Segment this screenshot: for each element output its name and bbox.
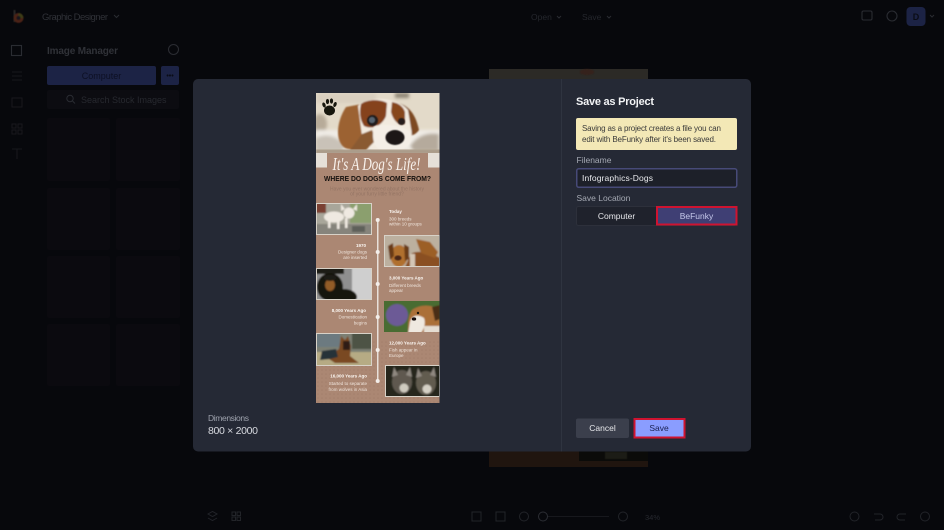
- avatar: [906, 7, 926, 26]
- computer button: Computer: [82, 71, 121, 81]
- notice box: edit with BeFunky after it's been saved.: [582, 135, 716, 144]
- more button: •••: [166, 73, 174, 80]
- timeline text: 16000 years: [328, 374, 367, 392]
- icon: comments: [862, 11, 872, 20]
- dimmed bottom toolbar: [208, 512, 930, 521]
- timeline text: 8000 years: begins: [354, 320, 368, 326]
- title band: [316, 153, 440, 168]
- icon: redo: [897, 514, 906, 520]
- more button: [161, 66, 179, 85]
- filename label: Filename: [576, 155, 612, 165]
- timeline text: today: within 10 groups: [389, 222, 423, 226]
- dimmed top bar: [14, 7, 934, 26]
- dimensions: [208, 413, 258, 437]
- timeline text: today: [389, 209, 423, 226]
- zoom out: [520, 512, 528, 521]
- photo: two brown dogs: [384, 235, 440, 267]
- photo: black and tan dog: [316, 268, 372, 300]
- image manager heading: Image Manager: [47, 46, 118, 57]
- save location label: Save Location: [576, 193, 631, 203]
- timeline text: 12000 years: [389, 340, 426, 358]
- timeline text: 8000 years: 8,000 Years Ago: [332, 308, 366, 313]
- zoom in: [618, 512, 628, 521]
- icon: layers: [208, 512, 217, 520]
- zoom slider: [538, 512, 609, 521]
- cancel button: Cancel: [589, 423, 616, 433]
- workspace label: Graphic Designer: [42, 12, 108, 23]
- dialog heading: Save as Project: [576, 96, 654, 108]
- icon: actual size: [496, 512, 505, 521]
- thumbnail grid: [47, 118, 180, 386]
- save menu: Save: [582, 12, 602, 22]
- icon: help: [887, 11, 897, 21]
- dimmed left sidebar: [12, 44, 180, 386]
- save location toggle: [576, 206, 736, 226]
- open menu: Open: [531, 12, 552, 22]
- photo: spaniel header: [313, 93, 440, 154]
- timeline text: 3000 years: Different breeds: [389, 283, 422, 288]
- icon: fit: [472, 512, 481, 521]
- timeline text: 16000 years: 16,000 Years Ago: [330, 374, 367, 378]
- icon: undo: [874, 514, 883, 520]
- timeline text: 16000 years: Started to separate: [329, 381, 367, 386]
- notice box: Saving as a project creates a file you can: [582, 124, 721, 133]
- timeline text: 1970: 1970: [356, 243, 366, 248]
- avatar: D: [913, 12, 920, 22]
- dimensions: 800 × 2000: [208, 425, 258, 437]
- timeline text: 12000 years: Europe: [389, 353, 404, 358]
- icon: grid: [232, 512, 240, 520]
- befunky option: BeFunky: [680, 211, 714, 221]
- photo: collie in flowers: [384, 301, 440, 332]
- title: It's A Dog's Life!: [332, 154, 421, 174]
- timeline text: today: Today: [389, 209, 402, 214]
- infographic preview: [313, 93, 442, 403]
- intro text: of your furry little friend?: [350, 192, 404, 198]
- timeline text: 1970: Designer dogs: [338, 250, 368, 254]
- timeline text: 1970: are inserted: [343, 255, 367, 260]
- befunky option: [657, 207, 736, 224]
- cancel button: [576, 418, 629, 438]
- photo: shepherd lying down: [316, 333, 372, 366]
- logo: [14, 10, 24, 23]
- sidebar icons: [12, 46, 22, 159]
- subtitle heading: WHERE DO DOGS COME FROM?: [324, 174, 431, 183]
- timeline text: 1970: [338, 243, 368, 260]
- computer button: [47, 66, 156, 85]
- dimmed canvas behind dialog: [489, 69, 648, 467]
- search box: [47, 90, 179, 109]
- timeline text: 3000 years: [389, 276, 424, 293]
- timeline text: 12000 years: 12,000 Years Ago: [389, 340, 426, 346]
- filename input: [577, 169, 737, 187]
- timeline text: 3000 years: appear: [389, 288, 404, 293]
- photo: two wolves: [385, 365, 440, 397]
- zoom percentage: 34%: [645, 513, 660, 522]
- icon: history: [920, 512, 930, 521]
- intro text: Have you ever wondered about the history: [330, 186, 424, 192]
- icon: refresh: [850, 512, 859, 521]
- notice box: [576, 118, 737, 150]
- timeline text: 8000 years: [332, 308, 368, 326]
- icon: info: [168, 44, 178, 54]
- timeline text: today: 300 breeds: [389, 216, 412, 222]
- icon: paw print: [322, 98, 337, 116]
- timeline text: 12000 years: Fish appear in: [389, 348, 418, 352]
- timeline: [376, 218, 380, 383]
- dialog: save as project: [193, 79, 751, 452]
- photo: white chihuahua: [316, 203, 372, 235]
- save location toggle: Computer: [598, 211, 635, 221]
- timeline text: 8000 years: Domestication: [338, 314, 367, 320]
- save button: Save: [649, 423, 669, 433]
- filename input: Infographics-Dogs: [582, 173, 653, 183]
- dimensions: Dimensions: [208, 413, 249, 423]
- timeline text: 3000 years: 3,000 Years Ago: [389, 276, 424, 280]
- save button: [634, 419, 684, 438]
- timeline text: 16000 years: from wolves in Asia: [328, 387, 367, 392]
- intro text: [330, 186, 424, 198]
- search box: Search Stock Images: [81, 95, 167, 105]
